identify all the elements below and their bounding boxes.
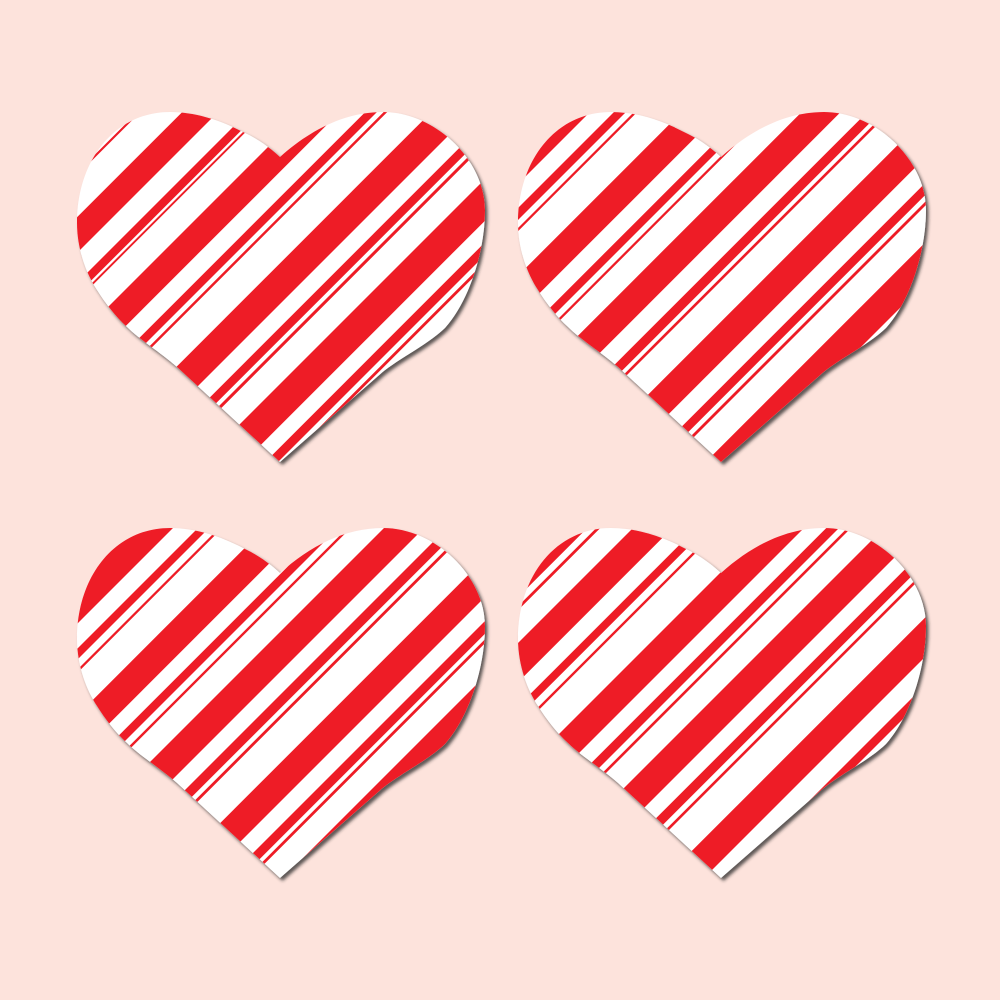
heart white base	[518, 528, 926, 878]
red diagonal stripes	[511, 521, 931, 886]
heart white base	[77, 112, 485, 462]
red diagonal stripes	[70, 105, 490, 470]
heart: bottom left	[70, 521, 490, 886]
heart white base	[518, 112, 926, 462]
heart: top right	[511, 105, 931, 470]
heart white base	[77, 528, 485, 878]
heart: top left	[70, 105, 490, 470]
red diagonal stripes	[77, 528, 485, 864]
heart: bottom right	[511, 521, 931, 886]
red diagonal stripes	[511, 105, 931, 470]
candy cane hearts illustration	[77, 112, 931, 883]
